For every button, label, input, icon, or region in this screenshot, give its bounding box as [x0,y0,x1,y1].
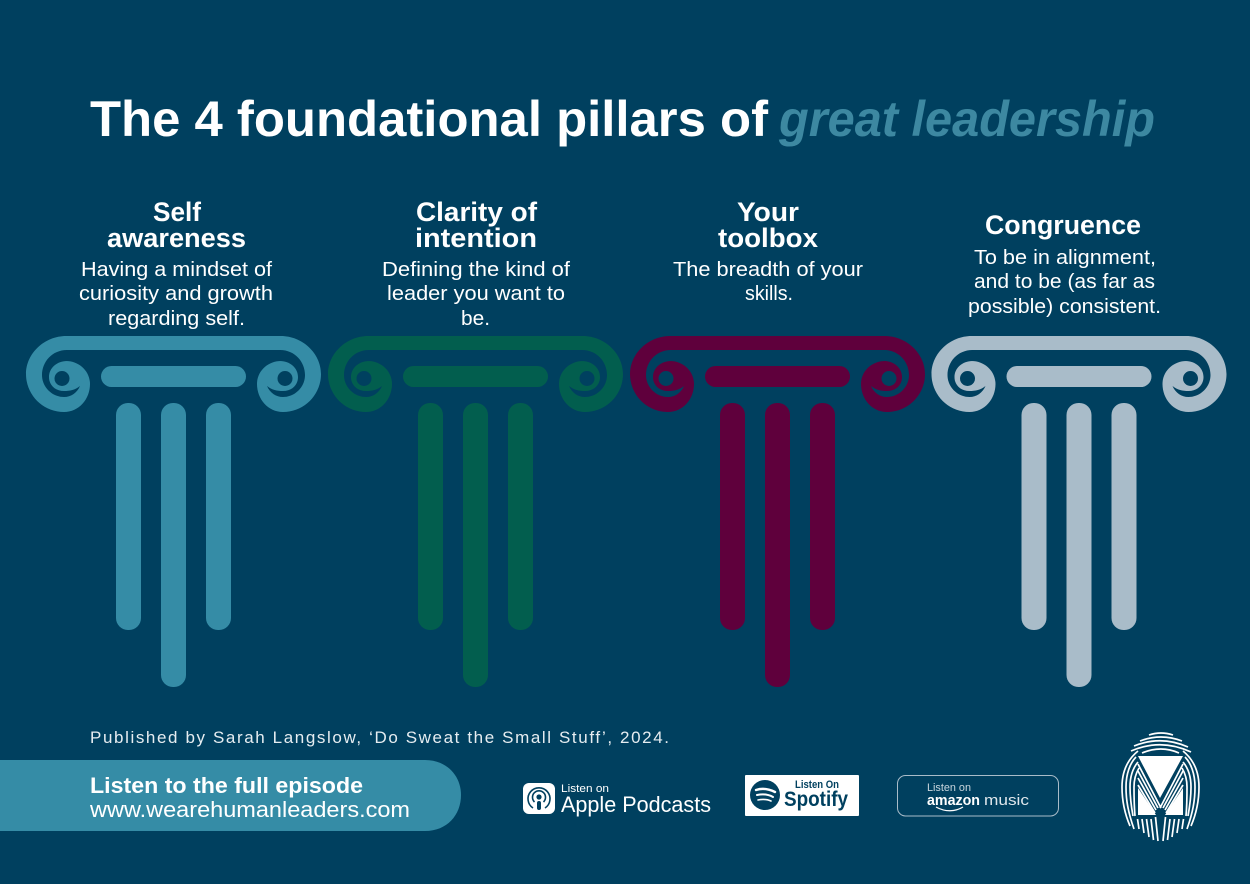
badge: Amazon Music: Listen on [927,782,971,794]
call to action banner: Listen to the full episode [90,773,363,798]
pillar 2: clarity of intention text [382,197,570,330]
logo: fingerprint M [1122,733,1199,841]
source note: Published by Sarah Langslow, ‘Do Sweat the Small Stuff’, 2024. [90,728,669,747]
pillar 4 icon [932,336,1226,687]
badge: Apple Podcasts [523,783,711,817]
badge: Apple Podcasts: Listen on [561,783,609,795]
pillar 3 icon [630,336,925,687]
pillar 2: clarity of intention text: leader you want to [387,282,565,305]
badge: Spotify: Spotify [784,788,848,811]
pillar 3: your toolbox text: The breadth of your [673,258,863,281]
pillar 4: congruence text: To be in alignment, [974,246,1156,269]
pillar 3: your toolbox text: skills. [745,282,793,305]
pillar 2: clarity of intention text: Defining the kind of [382,258,570,281]
title: The 4 foundational pillars of [90,91,768,147]
pillar 1: self awareness text: regarding self. [108,307,245,330]
pillar 2: clarity of intention text: be. [461,307,490,330]
pillar 1: self awareness text: awareness [107,223,246,253]
pillar 1: self awareness text: curiosity and growth [79,282,273,305]
pillar 3: your toolbox text [673,197,863,305]
badge: Amazon Music: music [984,792,1030,809]
title [90,91,1155,147]
pillar 1: self awareness text: Having a mindset of [81,258,272,281]
pillar 3: your toolbox text: Your [737,197,800,227]
pillar 4: congruence text: and to be (as far as [974,270,1155,293]
badge: Apple Podcasts: Apple Podcasts [561,792,711,817]
pillar 1: self awareness text [79,197,273,330]
pillar 1 icon [26,336,321,687]
pillar 4: congruence text [968,210,1161,318]
pillar 2: clarity of intention text: Clarity of [416,197,538,227]
call to action banner: www.wearehumanleaders.com [89,797,410,822]
pillar 4: congruence text: Congruence [985,210,1141,240]
pillar 2: clarity of intention text: intention [415,223,537,253]
pillar 2 icon [328,336,623,687]
pillar 1: self awareness text: Self [153,197,202,227]
pillar 4: congruence text: possible) consistent. [968,295,1161,318]
call to action banner [0,760,461,831]
badge: Amazon Music: amazon [927,792,980,809]
badge: Spotify [745,775,859,816]
pillar 3: your toolbox text: toolbox [718,223,818,253]
title: great leadership [778,91,1155,147]
badge: Spotify: Listen On [795,779,839,791]
badge: Amazon Music [898,776,1058,816]
